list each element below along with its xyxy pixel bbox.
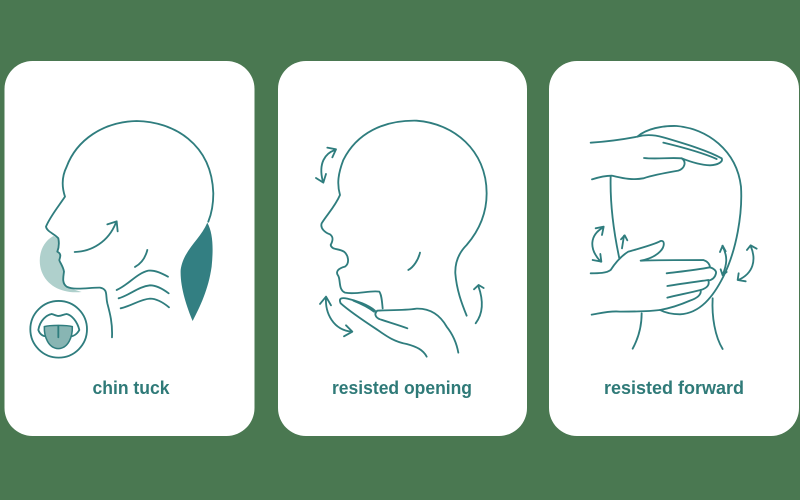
jaw line — [408, 253, 420, 270]
panel: chin tuck — [4, 61, 254, 436]
jaw line — [135, 250, 147, 267]
label: resisted opening: resisted opening — [332, 377, 472, 398]
upper hand — [591, 135, 722, 179]
label: resisted forward: resisted forward — [604, 377, 744, 398]
arrow — [75, 221, 118, 252]
panel: resisted opening — [278, 61, 527, 436]
neck wave lines — [117, 271, 169, 308]
neck muscle — [181, 223, 213, 321]
arrow: left double — [592, 227, 604, 262]
head outline — [637, 126, 741, 314]
head profile — [46, 121, 213, 337]
head profile — [321, 121, 487, 316]
panel: resisted forward — [549, 61, 799, 436]
arrow: small up — [621, 235, 627, 248]
arrow: back of neck — [474, 285, 484, 323]
neck — [633, 298, 723, 349]
hand — [340, 298, 458, 357]
lower hand — [591, 241, 716, 315]
label: chin tuck: chin tuck — [92, 377, 170, 398]
icon: tongue — [30, 301, 87, 358]
chin highlight — [40, 236, 82, 292]
arrow: chin double — [320, 297, 352, 336]
arrow: right double — [738, 245, 757, 281]
arrow: forehead double — [316, 148, 336, 183]
arrow: jaw double — [720, 246, 727, 275]
